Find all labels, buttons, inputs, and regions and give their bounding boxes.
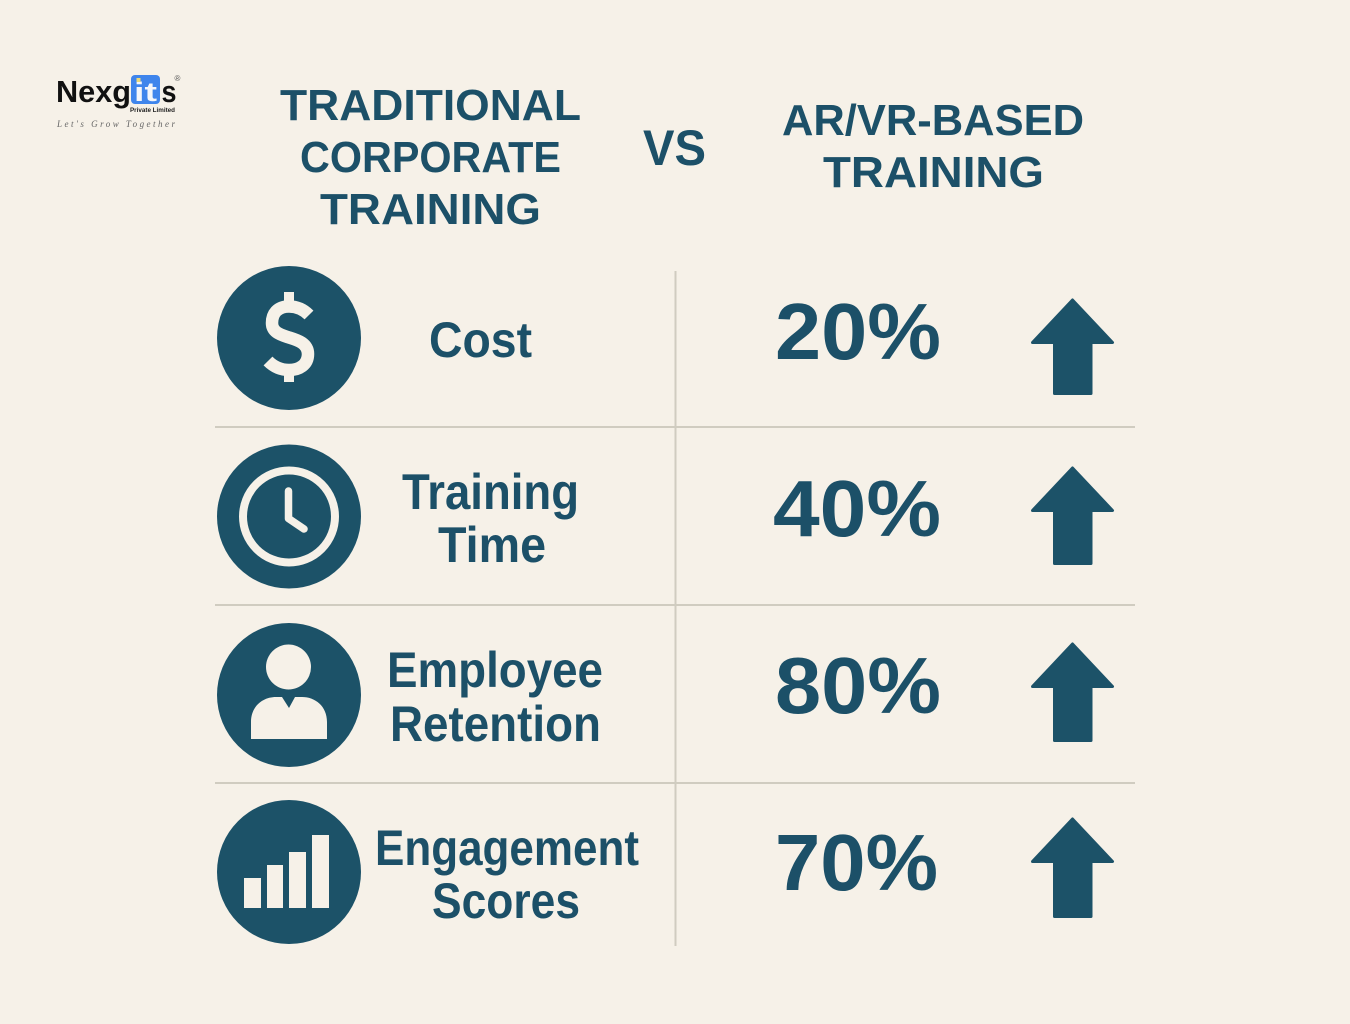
- icon: dollar: [217, 266, 361, 410]
- label: employee retention: Employee: [387, 642, 603, 698]
- value: 80%: 80%: [775, 641, 941, 730]
- value: 20%: 20%: [775, 287, 941, 376]
- label: training time: [402, 464, 579, 573]
- logo: Nexgits: Nexg: [56, 74, 131, 109]
- row: engagement scores: [217, 800, 1112, 944]
- label: training time: Training: [402, 464, 579, 520]
- label: cost: Cost: [429, 312, 532, 368]
- arrow: up: [1032, 300, 1112, 394]
- icon: bar chart: [217, 800, 361, 944]
- heading: AR/VR-based training: TRAINING: [823, 148, 1044, 197]
- value: 70%: 70%: [775, 818, 938, 907]
- label: engagement scores: Engagement: [375, 820, 639, 876]
- heading: traditional corporate training: CORPORATE: [300, 133, 561, 182]
- label: engagement scores: Scores: [432, 873, 580, 929]
- icon: clock: [217, 444, 361, 588]
- arrow: up: [1032, 819, 1112, 916]
- heading: traditional corporate training: [280, 81, 581, 234]
- logo: Nexgits: Let's Grow Together: [56, 119, 175, 129]
- arrow: up: [1032, 644, 1112, 740]
- label: employee retention: Retention: [390, 696, 601, 752]
- logo: Nexgits: Private Limited: [130, 107, 175, 114]
- label: training time: Time: [438, 517, 546, 573]
- logo: Nexgits: s: [162, 74, 176, 109]
- row: cost: [217, 266, 1112, 410]
- row: employee retention: [217, 623, 1112, 767]
- value: 40%: 40%: [773, 464, 941, 553]
- label: engagement scores: [375, 820, 639, 929]
- icon: person: [217, 623, 361, 767]
- row: training time: [217, 444, 1112, 588]
- arrow: up: [1032, 468, 1112, 564]
- logo: Nexgits: ®: [175, 74, 181, 83]
- heading: AR/VR-based training: AR/VR-BASED: [782, 96, 1084, 145]
- heading: traditional corporate training: TRAINING: [320, 185, 541, 234]
- heading: traditional corporate training: TRADITIONAL: [280, 81, 581, 130]
- label: employee retention: [387, 642, 603, 752]
- logo: Nexgits: it: [134, 77, 157, 107]
- heading: AR/VR-based training: [782, 96, 1084, 197]
- logo: Nexgits: [56, 74, 181, 129]
- heading: vs: VS: [643, 120, 706, 176]
